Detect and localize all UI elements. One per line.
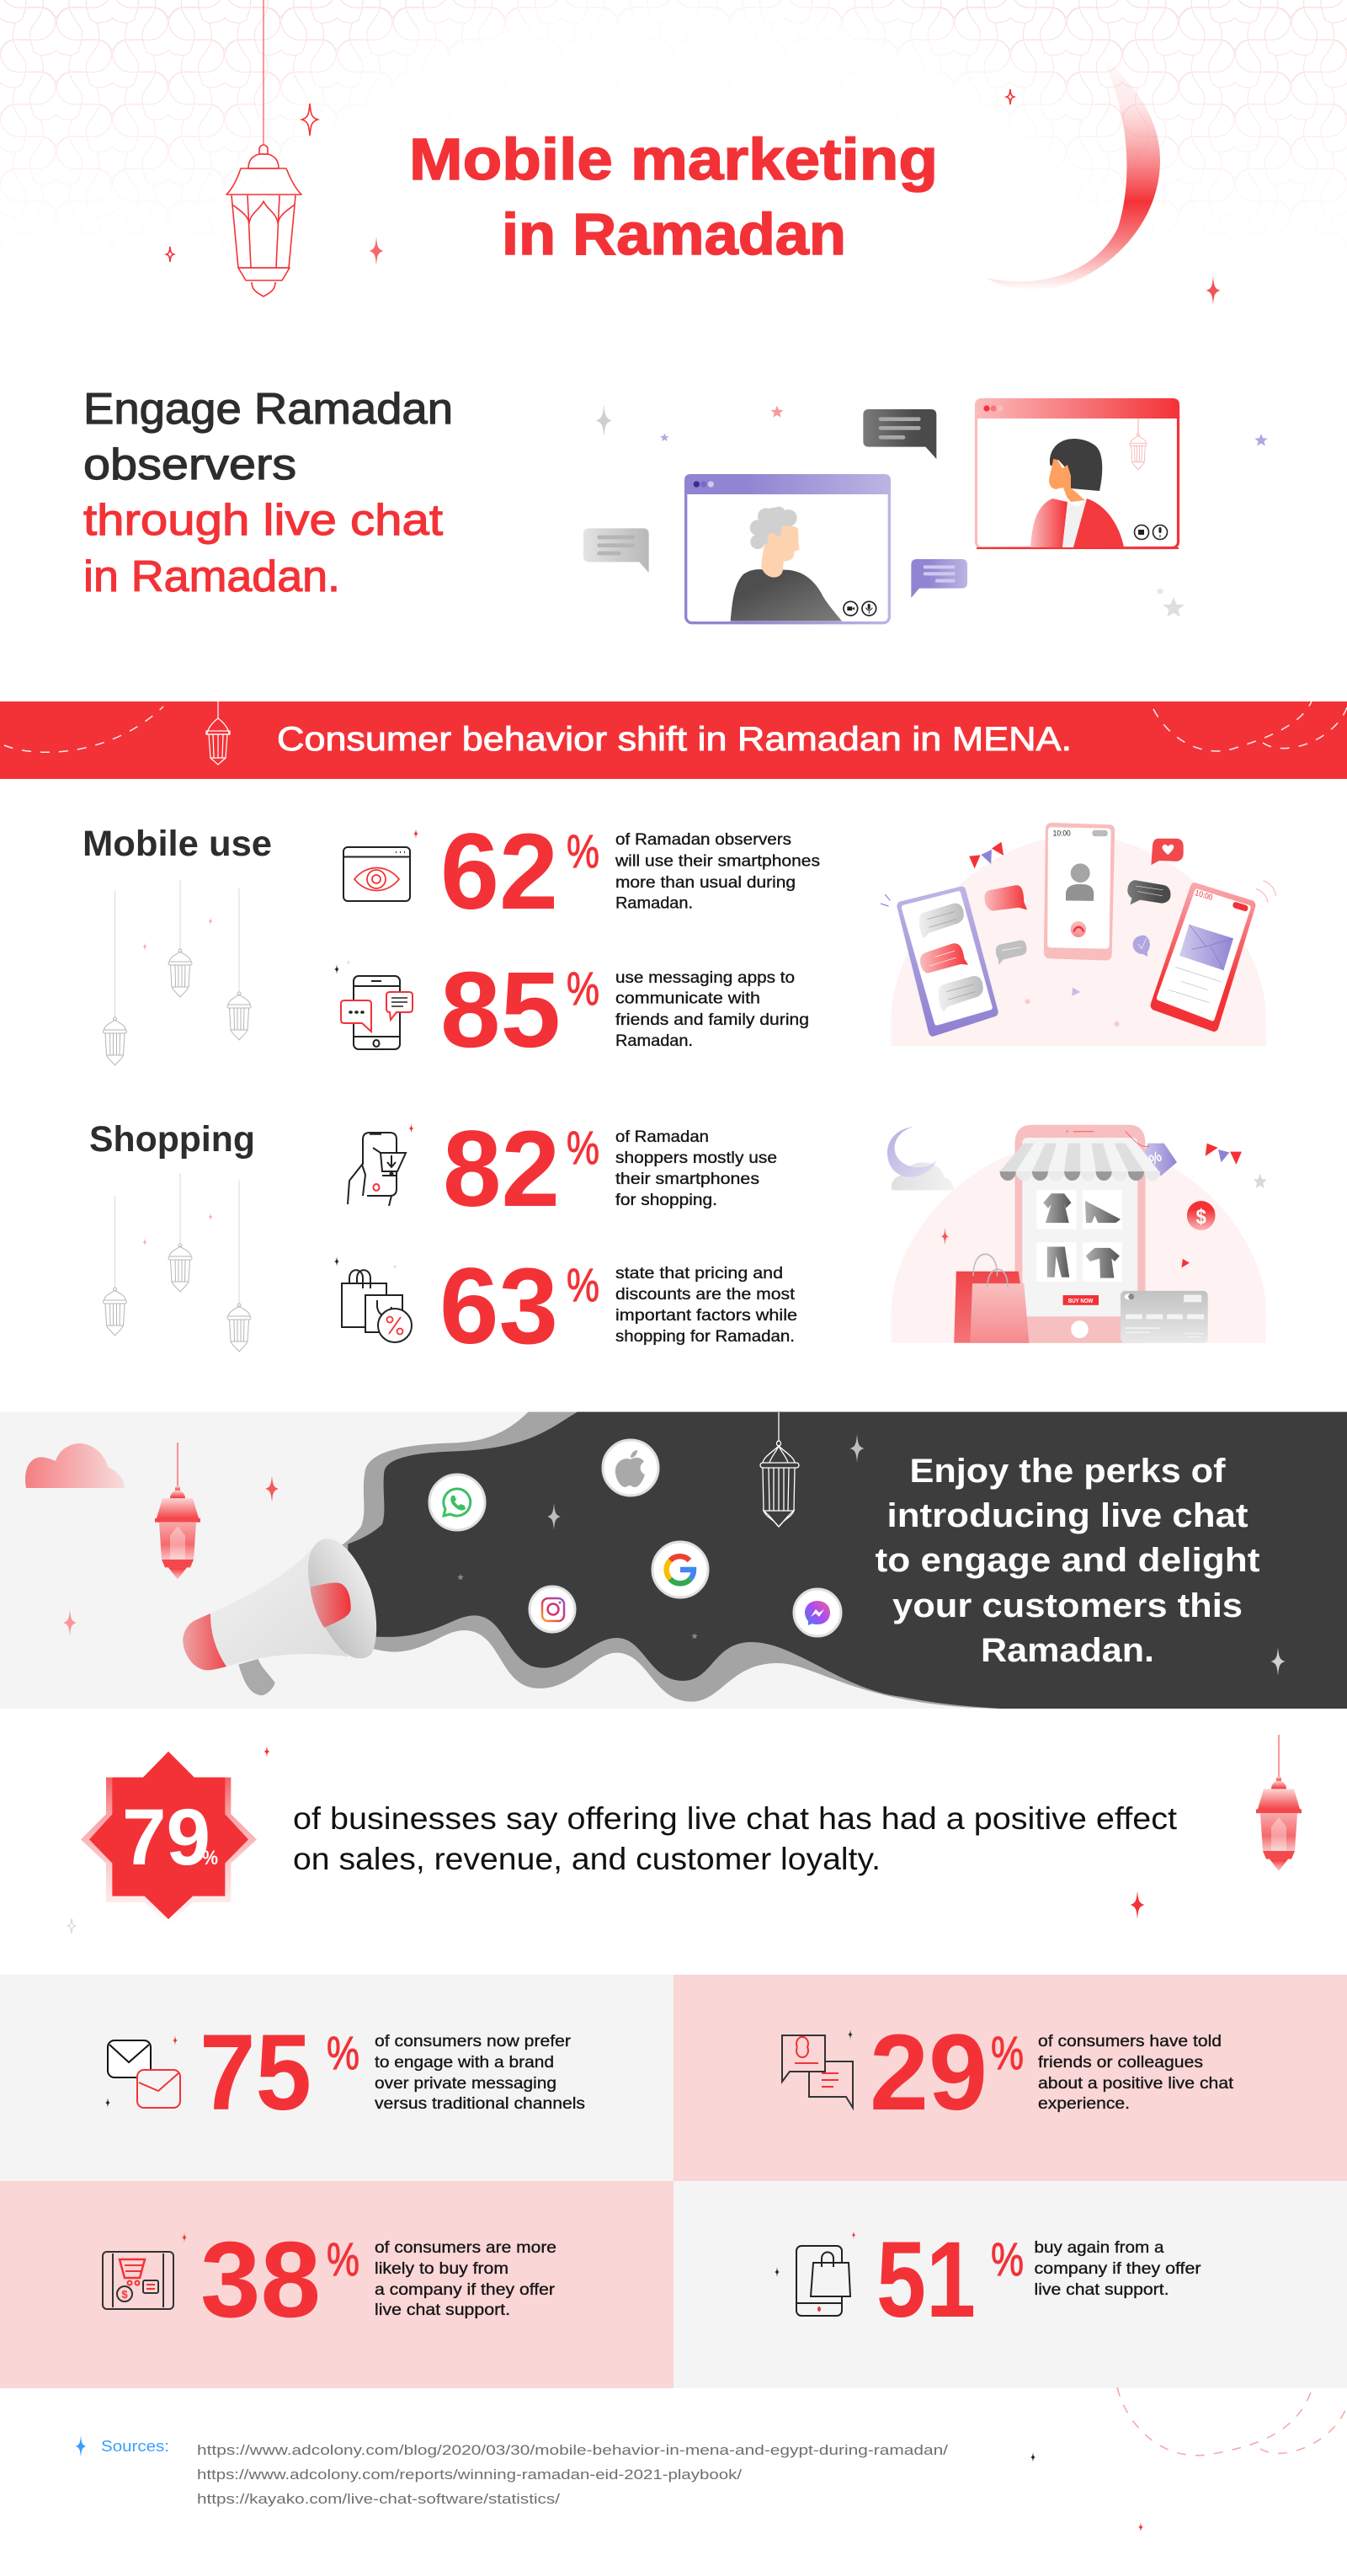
- description: [615, 1264, 797, 1346]
- header sparkles: [167, 89, 1221, 305]
- percent sign small: %: [202, 1847, 218, 1869]
- description: shopping for Ramadan.: [615, 1327, 795, 1346]
- illustration: mobile shop: BUY NOW: [1068, 1298, 1094, 1304]
- description: friends or colleagues: [1038, 2053, 1203, 2072]
- description: buy again from a: [1034, 2238, 1164, 2257]
- icon: browser eye: [343, 829, 418, 901]
- description: of Ramadan observers: [615, 830, 791, 849]
- value 62: 62: [440, 812, 558, 932]
- banner: consumer behavior: [0, 701, 1347, 779]
- illustration: phones and chat bubbles: [881, 823, 1275, 1046]
- heading: enjoy the perks: to engage and delight: [876, 1542, 1259, 1579]
- heading dark line 1: Engage Ramadan: [83, 385, 453, 434]
- heading: shopping: Shopping: [89, 1119, 255, 1160]
- icon: phone with shopping bag: [775, 2231, 855, 2316]
- value 51: 51: [876, 2220, 976, 2340]
- heading red line 4: in Ramadan.: [83, 552, 340, 601]
- icon: speech bubbles: [782, 2029, 853, 2108]
- intro heading: [83, 385, 453, 601]
- banner heading: Consumer behavior shift in Ramadan in MENA.: [277, 721, 1072, 758]
- icon: blue sparkle: [76, 2435, 86, 2457]
- value 29: 29: [870, 2013, 988, 2133]
- icon: phone basket in hand: [348, 1123, 414, 1206]
- banner dashed arcs: [4, 701, 1347, 752]
- value 79: 79: [122, 1793, 210, 1882]
- description: company if they offer: [1034, 2259, 1201, 2278]
- description: versus traditional channels: [375, 2094, 585, 2113]
- description: experience.: [1038, 2094, 1130, 2113]
- panel: 51 percent: [674, 2181, 1347, 2388]
- icon: red lantern right: [1256, 1735, 1302, 1871]
- stat 85 percent: [440, 950, 809, 1070]
- illustration: phones and chat bubbles: 10:00: [1195, 888, 1213, 902]
- heading: enjoy the perks: introducing live chat: [887, 1497, 1248, 1534]
- callout text: of businesses say offering live chat has had a positive effect: [293, 1801, 1178, 1836]
- panel: 75 percent: [0, 1975, 674, 2181]
- value 38: 38: [200, 2220, 321, 2340]
- description: of consumers now prefer: [375, 2032, 572, 2051]
- description: a company if they offer: [375, 2280, 556, 2299]
- heading red line 3: through live chat: [83, 496, 444, 545]
- source links: [197, 2442, 948, 2507]
- icon: tablet shopping: $: [121, 2288, 128, 2301]
- stat 82 percent: [443, 1109, 777, 1229]
- description: state that pricing and: [615, 1264, 783, 1283]
- heading dark line 2: observers: [83, 440, 296, 489]
- description: discounts are the most: [615, 1285, 796, 1304]
- source links: https://www.adcolony.com/blog/2020/03/30/mobile-behavior-in-mena-and-egypt-during-ramadan/: [197, 2442, 948, 2458]
- title: [409, 126, 938, 267]
- description: live chat support.: [375, 2301, 510, 2319]
- callout text: on sales, revenue, and customer loyalty.: [293, 1842, 881, 1876]
- sources label: Sources:: [101, 2438, 169, 2455]
- description: Ramadan.: [615, 1032, 693, 1050]
- description: friends and family during: [615, 1011, 809, 1029]
- value 75: 75: [200, 2013, 311, 2133]
- icon: white outlined lantern: [760, 1412, 799, 1527]
- sparkles: [67, 1746, 1145, 1933]
- description: communicate with: [615, 989, 760, 1007]
- description: of Ramadan: [615, 1128, 709, 1146]
- description: of consumers have told: [1038, 2032, 1222, 2051]
- heading: enjoy the perks: [876, 1453, 1259, 1669]
- 79 percent callout: [67, 1735, 1302, 1933]
- section: shopping: [89, 1109, 1267, 1367]
- description: [615, 1128, 777, 1209]
- source links: https://www.adcolony.com/reports/winning-ramadan-eid-2021-playbook/: [197, 2467, 742, 2483]
- illustration: mobile shop: %: [1146, 1147, 1164, 1169]
- icon: red lantern: [155, 1443, 200, 1580]
- percent sign: %: [327, 2232, 359, 2285]
- footer: sources: [76, 2387, 1347, 2532]
- icon: tablet shopping: [103, 2232, 187, 2309]
- value 82: 82: [443, 1109, 560, 1229]
- description: of consumers are more: [375, 2238, 556, 2257]
- title line 1: Mobile marketing: [409, 126, 938, 192]
- illustration: mobile shop: [887, 1125, 1267, 1343]
- app icon: instagram: [530, 1587, 575, 1632]
- app icon: whatsapp: [429, 1475, 485, 1530]
- description: [375, 2238, 556, 2319]
- hanging lanterns: [103, 880, 251, 1065]
- sparkles and stars: [63, 1434, 1285, 1676]
- description: their smartphones: [615, 1170, 759, 1188]
- icon: pink cloud: [25, 1443, 125, 1488]
- badge: eight point star: [81, 1752, 257, 1926]
- panel: perks of live chat: [0, 1412, 1347, 1709]
- description: over private messaging: [375, 2074, 556, 2093]
- description: important factors while: [615, 1306, 797, 1325]
- heading: mobile use: Mobile use: [83, 824, 272, 864]
- percent sign: %: [327, 2026, 359, 2079]
- description: [615, 968, 809, 1050]
- description: [1038, 2032, 1234, 2113]
- grey and purple decorative stars: [1156, 434, 1268, 617]
- icon: shopping bags with discount: [334, 1256, 412, 1342]
- banner lantern icon: [206, 701, 230, 765]
- description: likely to buy from: [375, 2259, 508, 2278]
- description: more than usual during: [615, 873, 796, 892]
- percent sign: %: [991, 2232, 1024, 2285]
- icon: outlined red lantern: [226, 0, 301, 296]
- red video window with woman: [975, 398, 1179, 549]
- app icon: apple: [603, 1440, 658, 1496]
- source links: https://kayako.com/live-chat-software/statistics/: [197, 2491, 560, 2507]
- percent sign: %: [567, 1121, 599, 1174]
- purple video window with man: [583, 404, 967, 623]
- percent sign: %: [567, 824, 599, 877]
- description: [615, 830, 820, 913]
- percent sign: %: [991, 2026, 1024, 2079]
- video chat illustration: [583, 398, 1268, 623]
- callout text: [293, 1801, 1178, 1876]
- description: [1034, 2238, 1201, 2299]
- description: live chat support.: [1034, 2280, 1169, 2299]
- hanging lanterns: [103, 1173, 251, 1352]
- app icon: messenger: [794, 1589, 841, 1636]
- description: use messaging apps to: [615, 968, 795, 987]
- header pattern background: [0, 0, 1347, 211]
- description: shoppers mostly use: [615, 1149, 777, 1167]
- icon: crescent moon: [987, 57, 1160, 290]
- stat 62 percent: [440, 812, 820, 932]
- title line 2: in Ramadan: [502, 201, 846, 267]
- description: about a positive live chat: [1038, 2074, 1234, 2093]
- heading: enjoy the perks: your customers this: [892, 1587, 1243, 1624]
- section: mobile use: [83, 812, 1275, 1070]
- illustration: mobile shop: $: [1196, 1205, 1206, 1229]
- illustration: phones and chat bubbles: 10:00: [1053, 829, 1071, 837]
- description: for shopping.: [615, 1191, 717, 1209]
- panel: 29 percent: [674, 1975, 1347, 2181]
- icon: phone messaging: [334, 959, 413, 1049]
- icon: megaphone: [183, 1539, 376, 1695]
- icon: envelopes: [105, 2035, 180, 2108]
- description: to engage with a brand: [375, 2053, 554, 2072]
- app icon: google: [652, 1542, 708, 1597]
- description: [375, 2032, 585, 2113]
- description: Ramadan.: [615, 894, 693, 913]
- percent sign: %: [567, 962, 599, 1015]
- pink dashed arcs and sparkles: [1030, 2387, 1347, 2532]
- stat 63 percent: [439, 1246, 797, 1367]
- dark wave shape: [339, 1412, 1347, 1709]
- heading: enjoy the perks: Enjoy the perks of: [909, 1453, 1226, 1490]
- description: will use their smartphones: [615, 852, 820, 871]
- value 85: 85: [440, 950, 561, 1070]
- value 63: 63: [439, 1246, 558, 1367]
- percent sign: %: [567, 1258, 599, 1311]
- heading: enjoy the perks: Ramadan.: [981, 1632, 1154, 1669]
- panel: 38 percent: [0, 2181, 674, 2388]
